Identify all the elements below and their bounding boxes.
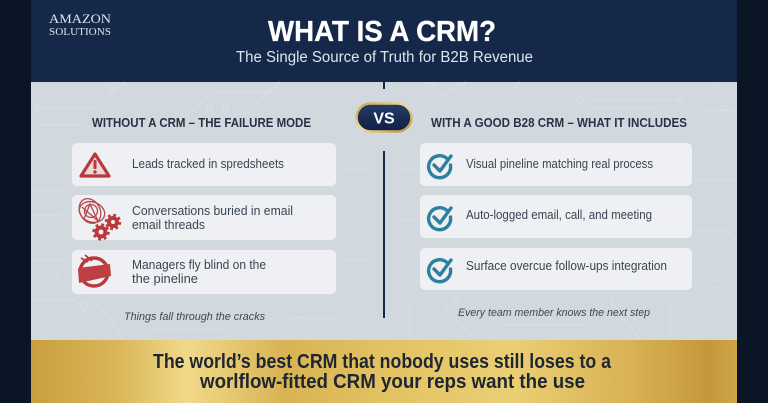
icon: check circle	[429, 156, 451, 178]
card: visual pipeline	[420, 143, 692, 186]
panel: with a good CRM	[420, 116, 692, 319]
logo: Amazon Solutions: SOLUTIONS	[49, 27, 111, 38]
card: conversations buried: Conversations buried in email	[132, 204, 293, 218]
card: leads tracked: Leads tracked in spredsheets	[132, 157, 284, 171]
card: auto-logged: Auto-logged email, call, and meeting	[466, 208, 652, 222]
card: leads tracked	[72, 143, 336, 186]
card: managers fly blind: Managers fly blind on the	[132, 258, 266, 272]
card: auto-logged	[420, 195, 692, 238]
card: managers fly blind: the pineline	[132, 272, 198, 286]
VS badge	[356, 104, 412, 132]
comparison panel background	[31, 82, 737, 340]
icon: check circle	[429, 208, 451, 230]
icon: tangled threads and gears	[75, 195, 120, 240]
footer message: The world’s best CRM that nobody uses still loses to a	[153, 351, 612, 373]
left heading: WITHOUT A CRM – THE FAILURE MODE	[92, 116, 311, 130]
card: visual pipeline: Visual pineline matching real process	[466, 157, 653, 171]
footer banner	[31, 340, 737, 403]
icon: check circle	[429, 260, 451, 282]
panel: without a CRM	[72, 116, 336, 323]
header band	[31, 0, 737, 82]
right caption: Every team member knows the next step	[458, 307, 650, 319]
title: WHAT IS A CRM?	[268, 16, 496, 48]
center divider	[383, 82, 385, 318]
card: conversations buried	[72, 195, 336, 240]
subtitle: The Single Source of Truth for B2B Revenue	[236, 49, 533, 66]
icon: blindfold circle	[78, 255, 111, 286]
icon: warning triangle	[81, 154, 109, 176]
logo: Amazon Solutions: AMAZON	[49, 11, 112, 26]
card: surface overdue: Surface overcue follow-ups integration	[466, 259, 667, 273]
left caption: Things fall through the cracks	[124, 311, 265, 323]
right heading: WITH A GOOD B28 CRM – WHAT IT INCLUDES	[431, 116, 687, 130]
logo: Amazon Solutions	[49, 11, 112, 38]
card: conversations buried: email threads	[132, 218, 205, 232]
card: managers fly blind	[72, 250, 336, 294]
VS badge: VS	[373, 110, 395, 128]
footer message: worlflow-fitted CRM your reps want the use	[199, 371, 585, 393]
footer message	[153, 351, 612, 393]
card: surface overdue	[420, 248, 692, 290]
